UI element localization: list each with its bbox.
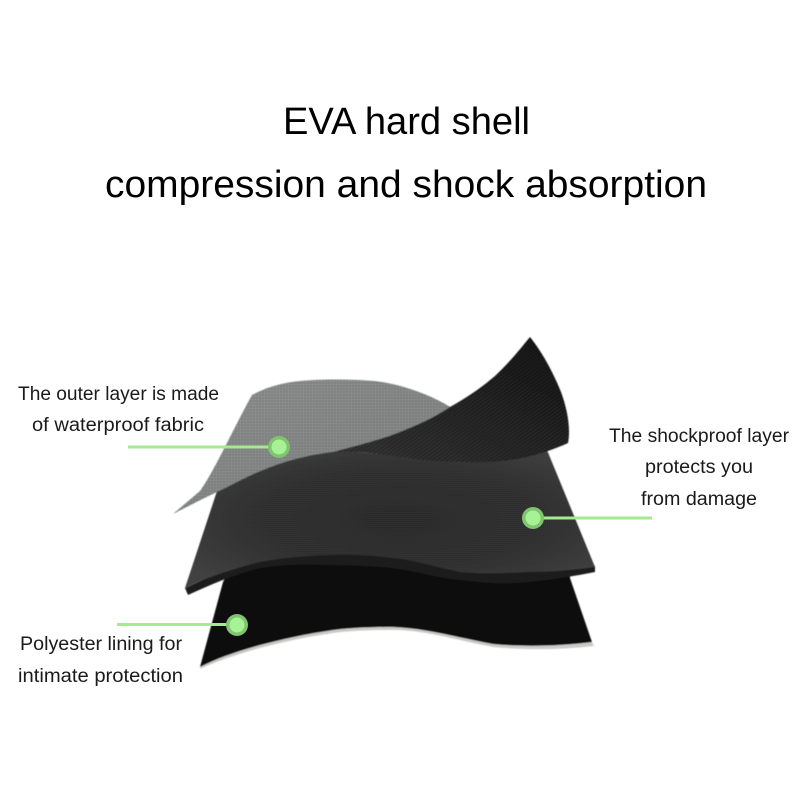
middle layer: shockproof foam bbox=[185, 450, 595, 595]
callout: outer layer: The outer layer is made bbox=[18, 384, 219, 405]
top layer: grey waterproof fabric bbox=[173, 380, 470, 514]
bottom layer: polyester lining bbox=[200, 560, 594, 669]
title: compression and shock absorption bbox=[105, 164, 707, 206]
callout: outer layer: of waterproof fabric bbox=[32, 415, 204, 436]
title: EVA hard shell bbox=[283, 101, 530, 143]
callout: polyester lining bbox=[18, 614, 248, 687]
callout: shockproof layer bbox=[522, 426, 790, 529]
callout: outer layer bbox=[18, 384, 290, 458]
layered material illustration bbox=[173, 337, 595, 669]
callout: polyester lining: intimate protection bbox=[18, 666, 183, 687]
title bbox=[105, 101, 707, 206]
top layer: dark curled backing bbox=[333, 337, 569, 462]
callout: shockproof layer: The shockproof layer bbox=[609, 426, 790, 447]
callout: polyester lining: Polyester lining for bbox=[20, 634, 183, 655]
callout: shockproof layer: from damage bbox=[641, 489, 757, 510]
callout: shockproof layer: protects you bbox=[645, 457, 753, 478]
